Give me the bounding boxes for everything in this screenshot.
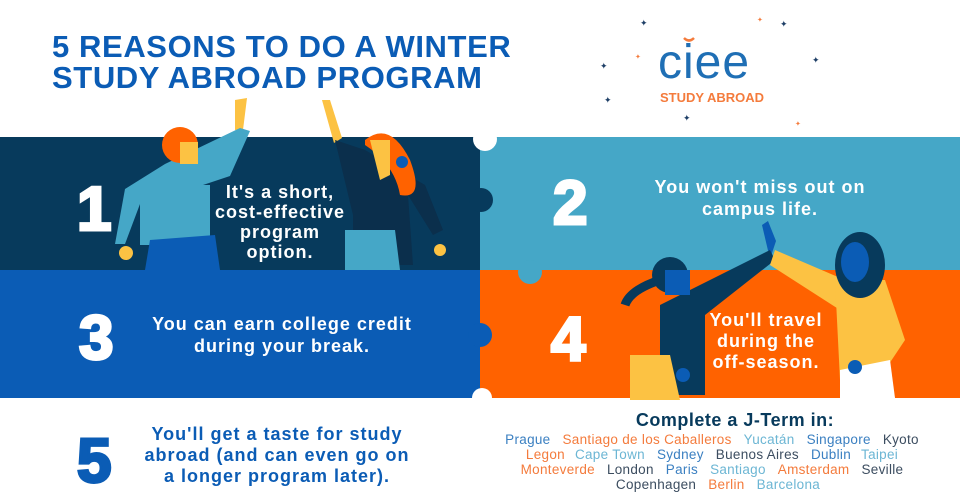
logo: ✦ [683, 113, 691, 123]
logo: ✦ [812, 55, 820, 65]
panel 3 background [0, 270, 480, 398]
logo: ✦ [795, 120, 801, 128]
panel 1 text: It's a short, [226, 182, 334, 202]
J-Term cities: Legon Cape Town Sydney Buenos Aires Dublin Taipei [526, 447, 898, 462]
panel 4 text: off-season. [712, 352, 820, 372]
logo [600, 16, 820, 128]
panel 5 text: a longer program later). [164, 466, 390, 486]
title [52, 29, 511, 95]
logo: ✦ [757, 16, 763, 24]
number 5: 5 [77, 427, 111, 496]
panel 5 text: abroad (and can even go on [144, 445, 410, 465]
title: 5 REASONS TO DO A WINTER [52, 29, 511, 64]
illustration: two women high five [115, 98, 446, 270]
panel 1 text: option. [247, 242, 313, 262]
panel 3 text [152, 314, 412, 356]
panel 5 text [144, 424, 410, 486]
panel 2 text [655, 177, 865, 219]
panel 3 text: during your break. [194, 336, 370, 356]
numbers: 4 [551, 305, 586, 374]
numbers: 2 [553, 169, 587, 238]
logo: ✦ [635, 53, 641, 61]
logo: ✦ [640, 18, 648, 28]
panel 4 text: during the [717, 331, 815, 351]
title: STUDY ABROAD PROGRAM [52, 60, 483, 95]
J-Term cities: Monteverde London Paris Santiago Amsterdam Seville [521, 462, 903, 477]
panel 1 text: cost-effective [215, 202, 345, 222]
panel 2 text: You won't miss out on [655, 177, 865, 197]
panel 4 background [480, 270, 960, 398]
panel 4 text [710, 310, 822, 372]
logo: ✦ [600, 61, 608, 71]
logo: ✦ [780, 19, 788, 29]
J-Term cities [505, 410, 919, 492]
panel 1 text [215, 182, 345, 262]
logo: ✦ [604, 95, 612, 105]
numbers: 1 [77, 175, 111, 244]
panel 1 background [0, 137, 480, 270]
J-Term cities: Copenhagen Berlin Barcelona [616, 477, 820, 492]
logo: ciee [658, 36, 750, 89]
numbers [77, 169, 587, 374]
numbers: 3 [79, 304, 113, 373]
panel 1 text: program [240, 222, 320, 242]
puzzle knobs [468, 127, 542, 408]
panel 2 background [480, 137, 960, 270]
J-Term cities: Complete a J-Term in: [636, 410, 834, 430]
logo: STUDY ABROAD [660, 90, 764, 105]
J-Term cities: Prague Santiago de los Caballeros Yucatán Singapore Kyoto [505, 432, 919, 447]
panel 5 text: You'll get a taste for study [152, 424, 402, 444]
panel 3 text: You can earn college credit [152, 314, 412, 334]
panel 2 text: campus life. [702, 199, 818, 219]
illustration: two women high five panel 2/4 [625, 221, 905, 400]
panel 4 text: You'll travel [710, 310, 822, 330]
